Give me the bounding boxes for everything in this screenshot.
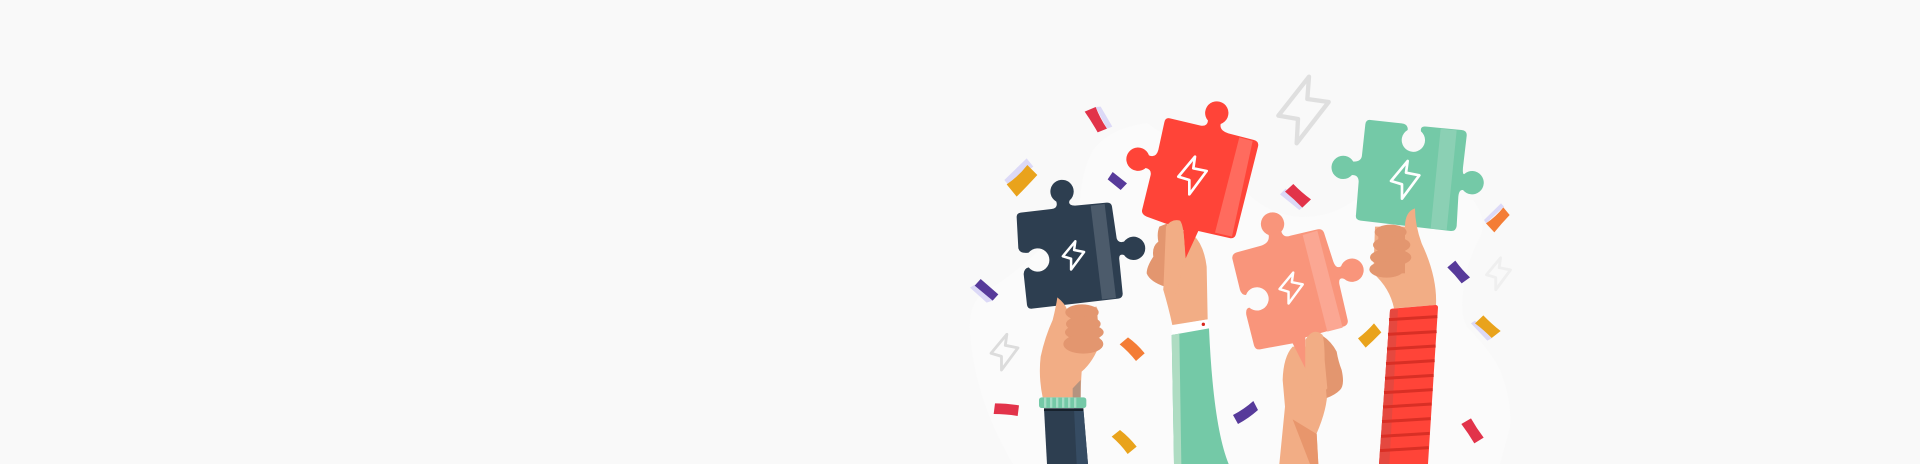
arm: red striped sleeve xyxy=(1379,305,1438,464)
icon: large grey bolt xyxy=(1278,77,1329,143)
arm: green sleeve with white cuff xyxy=(1172,319,1229,464)
hand: palm holding red piece xyxy=(1163,225,1208,325)
left half of the illustration xyxy=(970,101,1258,464)
hand: holding navy piece xyxy=(1039,297,1104,408)
hand: thumb and fingers on salmon piece xyxy=(1305,332,1343,403)
puzzle piece: green xyxy=(1331,120,1484,231)
puzzle piece: salmon xyxy=(1232,212,1364,368)
background blob xyxy=(970,123,1510,464)
hand: thumb and fingers on red piece xyxy=(1147,220,1185,293)
wristband xyxy=(1039,397,1086,408)
icon: small grey bolt xyxy=(991,334,1018,370)
hand: holding green piece xyxy=(1369,208,1436,308)
confetti: left group xyxy=(970,107,1258,454)
icon: faint grey bolt xyxy=(1486,258,1511,290)
puzzle piece: red xyxy=(1126,101,1258,258)
confetti: right group xyxy=(1280,184,1510,443)
arm: navy sleeve xyxy=(1044,408,1088,464)
hand: palm holding salmon piece xyxy=(1279,347,1327,464)
right half of the illustration xyxy=(1232,77,1511,464)
puzzle piece: navy xyxy=(1017,180,1145,309)
